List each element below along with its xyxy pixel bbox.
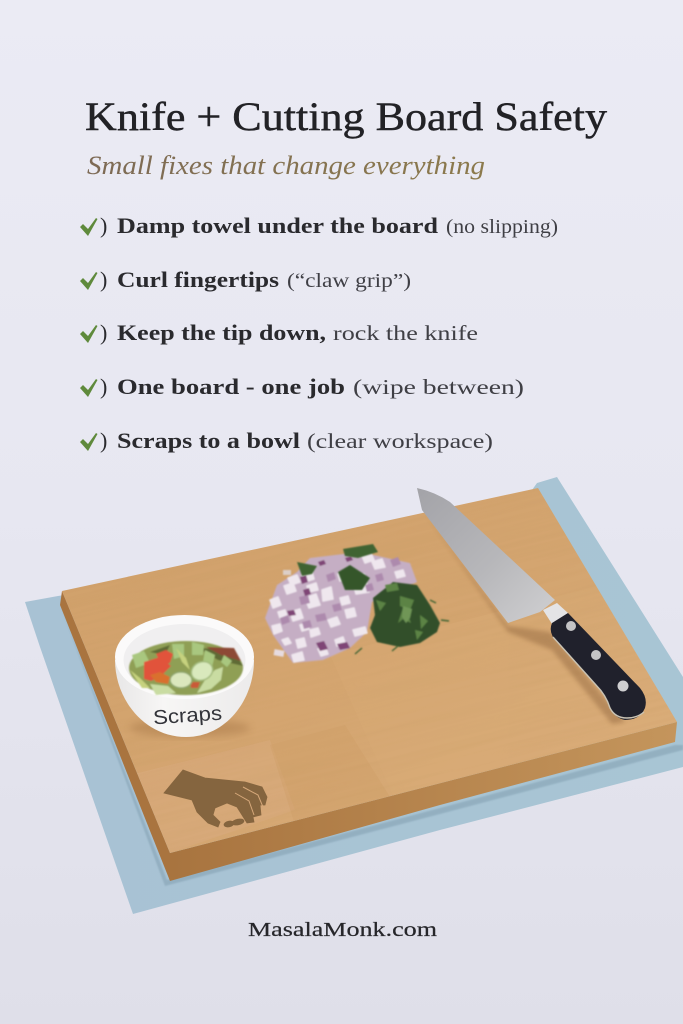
scraps food xyxy=(129,641,243,695)
cutting board xyxy=(60,488,677,881)
item: damp towel xyxy=(80,213,558,238)
item: keep the tip down: ) xyxy=(100,320,107,345)
handle xyxy=(551,613,646,720)
item: damp towel: Damp towel under the board xyxy=(117,213,438,238)
website credit: MasalaMonk.com xyxy=(248,919,438,941)
item: one board one job: ) xyxy=(100,374,107,399)
item: scraps to a bowl: (clear workspace) xyxy=(307,429,493,453)
item: keep the tip down xyxy=(80,320,478,345)
item: curl fingertips: (“claw grip”) xyxy=(287,270,411,292)
icon: claw grip hand xyxy=(164,770,267,828)
item: curl fingertips xyxy=(80,267,411,292)
board top face xyxy=(62,488,677,853)
item: curl fingertips: ) xyxy=(100,267,107,292)
knife shadow xyxy=(424,512,625,724)
scraps bowl xyxy=(115,615,254,737)
bowl shadow xyxy=(130,719,250,737)
checklist xyxy=(80,213,558,453)
item: damp towel: ) xyxy=(100,213,107,238)
bowl label: Scraps xyxy=(152,703,223,729)
item: one board one job xyxy=(80,374,524,399)
blade xyxy=(417,488,555,623)
chef knife xyxy=(417,488,646,724)
item: one board one job: (wipe between) xyxy=(353,375,524,399)
chopped onion pile xyxy=(265,552,417,663)
chopped herbs xyxy=(297,544,449,654)
board side edges xyxy=(60,591,170,881)
item: scraps to a bowl: Scraps to a bowl xyxy=(117,428,300,453)
item: damp towel: (no slipping) xyxy=(446,216,558,238)
rivets xyxy=(566,621,576,631)
towel xyxy=(25,477,683,914)
bowl rim xyxy=(115,615,254,699)
bolster xyxy=(543,603,568,624)
bowl interior xyxy=(124,624,246,696)
item: scraps to a bowl xyxy=(80,428,493,453)
item: curl fingertips: Curl fingertips xyxy=(117,267,279,292)
title: Knife + Cutting Board Safety xyxy=(85,94,607,139)
item: keep the tip down: rock the knife xyxy=(333,321,478,345)
item: keep the tip down: Keep the tip down, xyxy=(117,320,326,345)
bowl body xyxy=(115,660,254,737)
item: scraps to a bowl: ) xyxy=(100,428,107,453)
item: one board one job: One board - one job xyxy=(117,374,345,399)
subtitle: Small fixes that change everything xyxy=(87,151,485,180)
